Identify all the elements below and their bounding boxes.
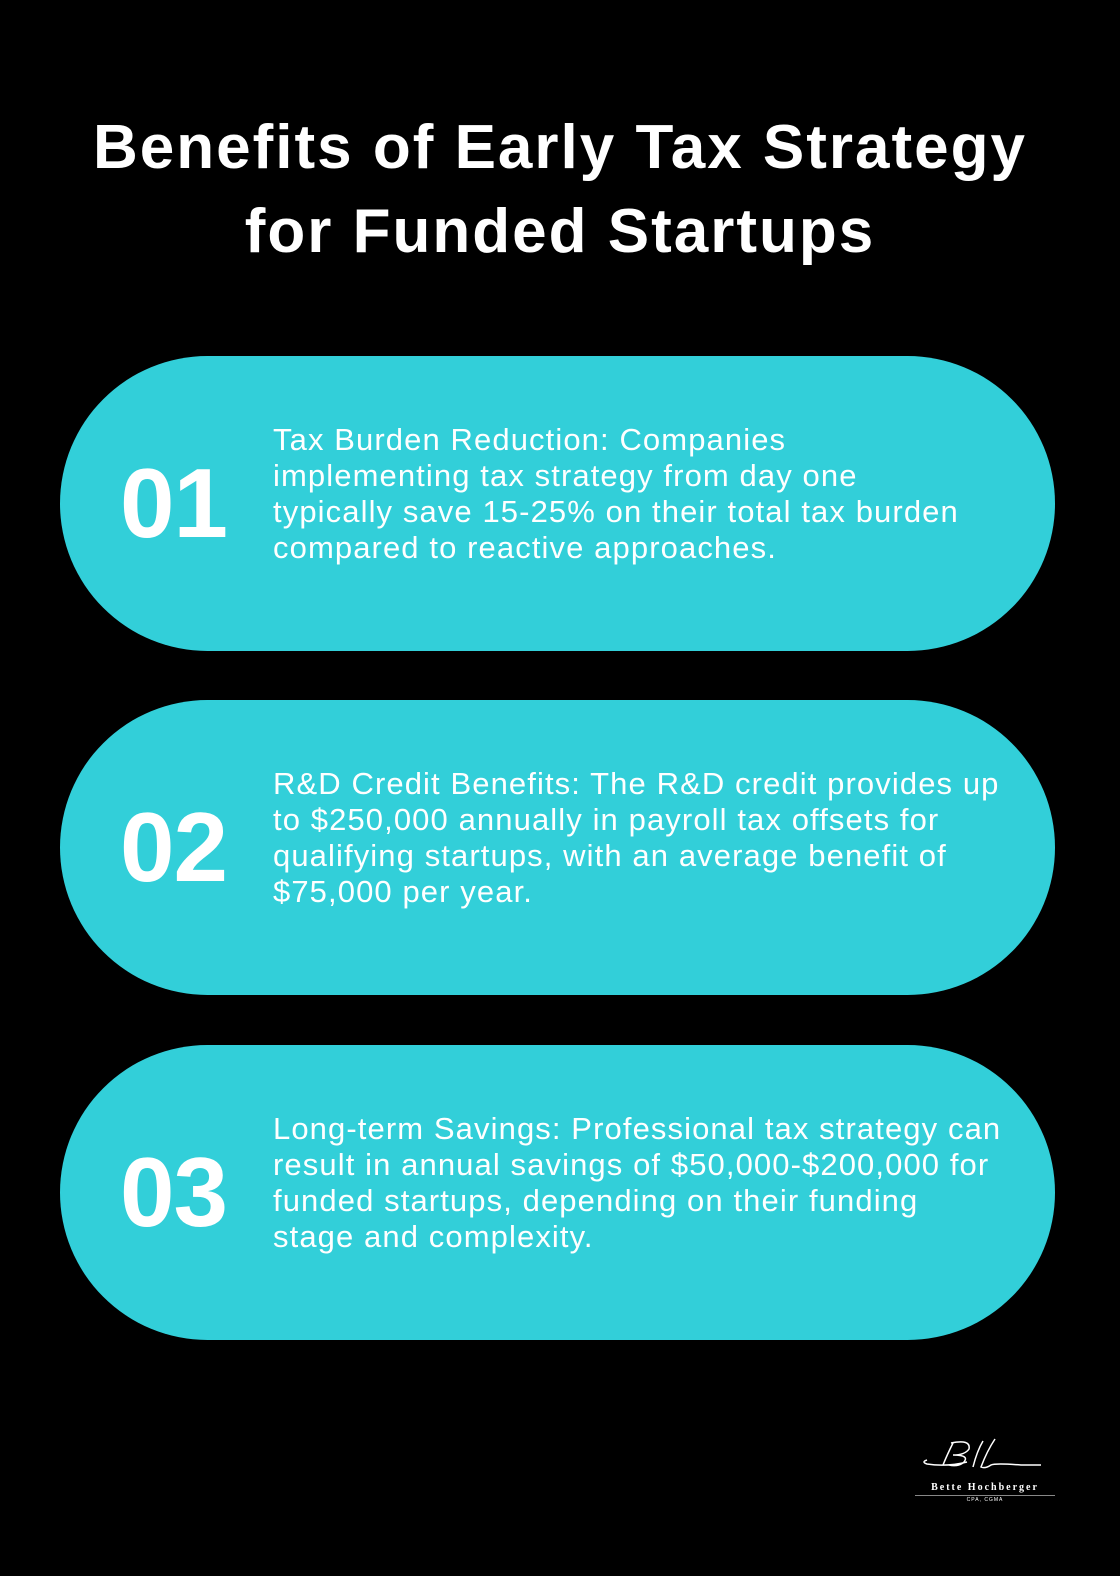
text block 01	[273, 422, 959, 565]
text block 01: Tax Burden Reduction: Companies	[273, 422, 786, 457]
text block 01: compared to reactive approaches.	[273, 530, 777, 565]
logo: Bette Hochberger: Bette Hochberger	[931, 1482, 1039, 1493]
text block 01: implementing tax strategy from day one	[273, 458, 858, 493]
panel: 01 tax burden reduction	[60, 356, 1055, 651]
text block 02	[273, 766, 1000, 909]
number 01: 01	[120, 448, 227, 558]
number 03: 03	[120, 1137, 227, 1247]
title: Benefits of Early Tax Strategy	[93, 113, 1027, 182]
logo: Bette Hochberger: CPA, CGMA	[967, 1497, 1003, 1503]
text block 01: typically save 15-25% on their total tax burden	[273, 494, 959, 529]
text block 02: to $250,000 annually in payroll tax offsets for	[273, 802, 939, 837]
text block 02: $75,000 per year.	[273, 874, 533, 909]
logo: Bette Hochberger	[915, 1438, 1055, 1503]
text block 03: funded startups, depending on their funding	[273, 1183, 918, 1218]
text block 03	[273, 1111, 1001, 1254]
text block 03: Long-term Savings: Professional tax strategy can	[273, 1111, 1001, 1146]
title	[93, 113, 1027, 266]
panel: 03 long-term savings	[60, 1045, 1055, 1340]
number 02: 02	[120, 792, 227, 902]
text block 03: result in annual savings of $50,000-$200,000 for	[273, 1147, 989, 1182]
panel: 02 R&D credit	[60, 700, 1055, 995]
text block 02: R&D Credit Benefits: The R&D credit provides up	[273, 766, 1000, 801]
text block 03: stage and complexity.	[273, 1219, 594, 1254]
text block 02: qualifying startups, with an average benefit of	[273, 838, 947, 873]
title: for Funded Startups	[245, 197, 875, 266]
